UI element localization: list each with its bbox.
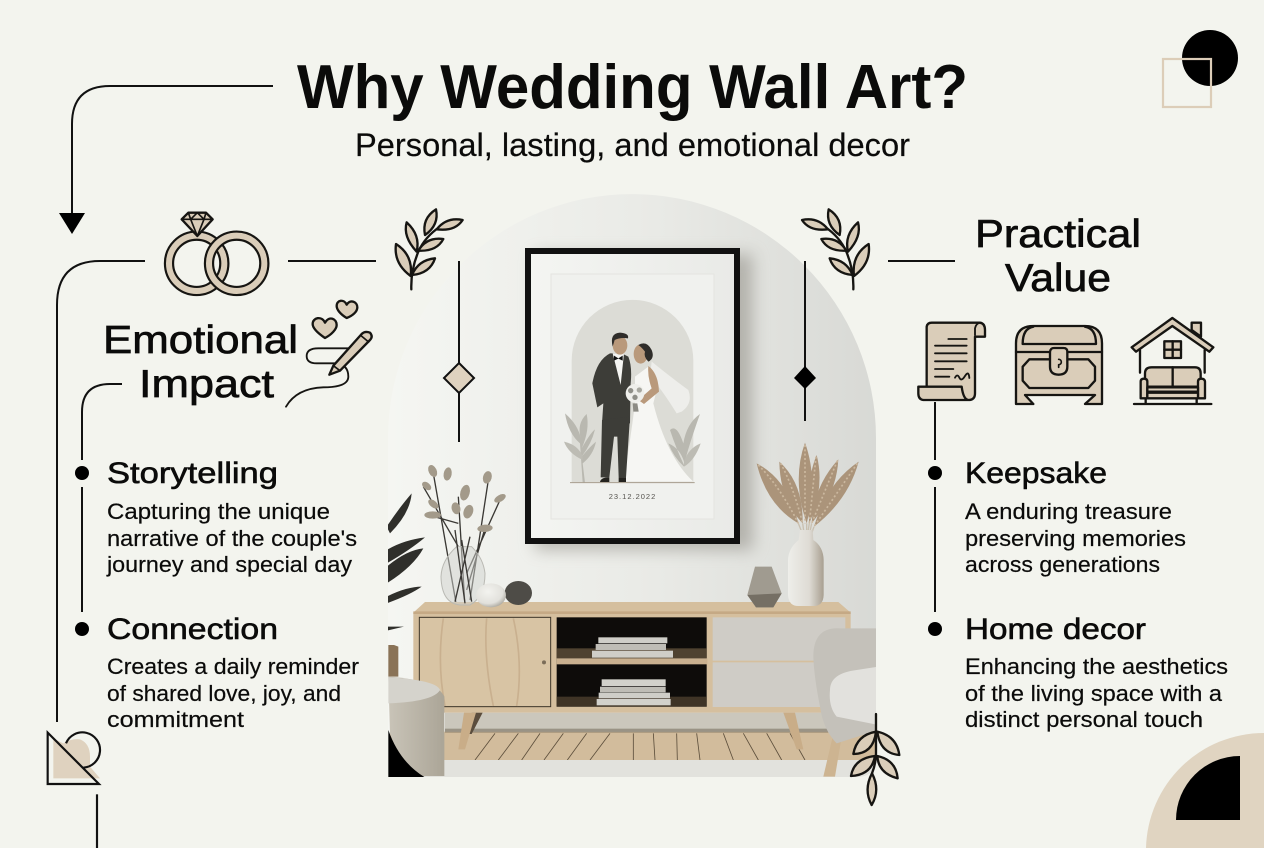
print date: 23.12.2022: [609, 492, 656, 501]
item: storytelling: Storytelling: [107, 457, 278, 490]
item: connection: of shared love, joy, and: [107, 681, 341, 706]
vases and spheres on cabinet: [441, 530, 824, 607]
plant: dark leaves: [387, 493, 425, 631]
title: Why Wedding Wall Art?: [297, 53, 968, 122]
groom: [592, 353, 631, 423]
bouquet: [626, 384, 644, 403]
decorative shape: bottom right quarter circle: [1146, 733, 1264, 848]
plant: pampas grass: [757, 443, 859, 540]
armchair: [813, 628, 878, 777]
item: connection: Connection: [107, 613, 278, 646]
photo: arched room scene: [387, 194, 878, 778]
decorative shape: triangle and circle: [48, 732, 100, 848]
floor: [390, 732, 877, 760]
item: home decor: [928, 613, 1228, 732]
item: storytelling: Capturing the unique: [107, 499, 330, 524]
icon: treasure chest: [1016, 326, 1102, 404]
item: storytelling: narrative of the couple's: [107, 526, 357, 551]
item: storytelling: journey and special day: [106, 552, 352, 577]
icon: house with sofa: [1132, 318, 1213, 404]
item: home decor: distinct personal touch: [965, 707, 1203, 732]
item: connection: Creates a daily reminder: [107, 654, 359, 679]
heading: practical value: [975, 213, 1141, 300]
shelf cabinet: [390, 602, 877, 778]
item: keepsake: preserving memories: [965, 526, 1186, 551]
heading: emotional impact: Impact: [139, 363, 274, 406]
bride: [623, 367, 693, 482]
heading: emotional impact: Emotional: [103, 319, 298, 362]
arrow: title to emotional impact: [59, 86, 273, 234]
icon: left leaf sprig: [396, 209, 463, 289]
connector lines: practical side: [888, 261, 955, 612]
icon: hearts and pencil: [286, 301, 372, 407]
body: [413, 602, 851, 713]
item: home decor: Enhancing the aesthetics: [965, 654, 1228, 679]
item: connection: commitment: [107, 707, 244, 732]
icon: scroll: [918, 323, 985, 400]
heading: practical value: Practical: [975, 213, 1141, 256]
plant: eucalyptus branches: [420, 464, 507, 607]
subtitle: Personal, lasting, and emotional decor: [355, 127, 910, 163]
heading: practical value: Value: [1005, 257, 1111, 300]
item: connection: [75, 613, 359, 732]
item: keepsake: A enduring treasure: [965, 499, 1172, 524]
item: keepsake: Keepsake: [965, 457, 1107, 490]
icon: wedding rings: [169, 213, 264, 291]
books: [598, 637, 667, 643]
framed print shadow: [535, 254, 753, 550]
item: home decor: of the living space with a: [965, 681, 1223, 706]
pouf and dark floor corner: [388, 645, 444, 778]
framed wedding print: [528, 251, 737, 541]
divider: left stem with beige diamond: [444, 261, 474, 442]
item: home decor: Home decor: [965, 613, 1146, 646]
decorative shape: circle and square: [1163, 30, 1238, 107]
connector lines: emotional side: [57, 261, 376, 722]
icon: right leaf sprig: [802, 209, 869, 289]
item: keepsake: [928, 457, 1186, 577]
heading: emotional impact: [103, 319, 298, 406]
icon: bottom leaf sprig: [851, 714, 899, 805]
item: keepsake: across generations: [965, 552, 1160, 577]
legs: [468, 713, 483, 734]
item: storytelling: [75, 457, 357, 577]
divider: right stem with black diamond: [794, 261, 816, 421]
